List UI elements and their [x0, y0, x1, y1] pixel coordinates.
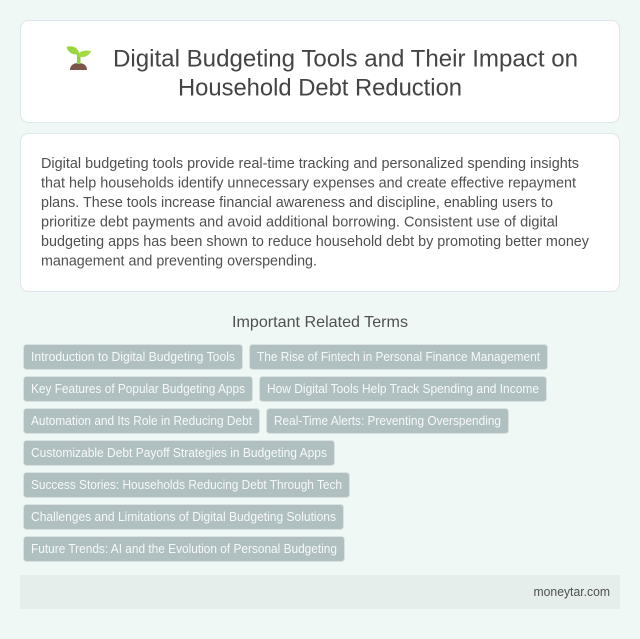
chip: real-time alerts: [266, 408, 508, 434]
text block: summary: that help households identify unnecessary expenses and create effective repayment: [41, 174, 577, 192]
chip: rise of fintech: [250, 344, 548, 370]
text block: summary: Digital budgeting tools provide real-time tracking and personalized spending insights: [41, 155, 579, 172]
chip: success stories: [24, 472, 350, 498]
panel: title card: [20, 20, 620, 122]
text block: summary: management and preventing overspending.: [41, 252, 317, 270]
chip: success stories: Success Stories: Households Reducing Debt Through Tech: [31, 477, 342, 492]
chip: track spending: How Digital Tools Help Track Spending and Income: [267, 381, 539, 396]
chip: automation: [24, 408, 260, 434]
text block: summary: budgeting apps has been shown to reduce household debt by promoting better money: [41, 233, 589, 250]
chip: rise of fintech: The Rise of Fintech in Personal Finance Management: [257, 349, 540, 364]
chip: challenges: Challenges and Limitations of Digital Budgeting Solutions: [31, 509, 336, 524]
chip: debt payoff: Customizable Debt Payoff Strategies in Budgeting Apps: [31, 445, 327, 460]
chip: future trends: [24, 536, 344, 562]
chip: key features: Key Features of Popular Budgeting Apps: [31, 381, 245, 396]
panel: footer: [20, 575, 620, 609]
chip: challenges: [24, 504, 344, 530]
chip: introduction: [24, 344, 242, 370]
icon: seedling: [66, 46, 91, 70]
text block: summary: [41, 155, 589, 270]
heading: related terms: Important Related Terms: [232, 314, 408, 331]
text block: summary: plans. These tools increase financial awareness and discipline, enabling users to: [41, 194, 553, 211]
chip: future trends: Future Trends: AI and the Evolution of Personal Budgeting: [31, 541, 337, 556]
title: Digital Budgeting Tools and Their Impact on: [113, 46, 578, 72]
panel: related term chips: [24, 344, 548, 562]
title: Household Debt Reduction: [178, 74, 462, 102]
panel: summary card: [20, 134, 620, 292]
chip: debt payoff: [24, 440, 334, 466]
chip: introduction: Introduction to Digital Budgeting Tools: [31, 349, 235, 364]
chip: real-time alerts: Real-Time Alerts: Preventing Overspending: [274, 413, 501, 428]
text block: summary: prioritize debt payments and avoid additional borrowing. Consistent use of digital: [41, 214, 558, 230]
chip: key features: [24, 376, 252, 402]
title: [113, 46, 578, 102]
chip: automation: Automation and Its Role in Reducing Debt: [31, 413, 252, 428]
footer source text: moneytar.com: [534, 584, 610, 599]
chip: track spending: [260, 376, 546, 402]
